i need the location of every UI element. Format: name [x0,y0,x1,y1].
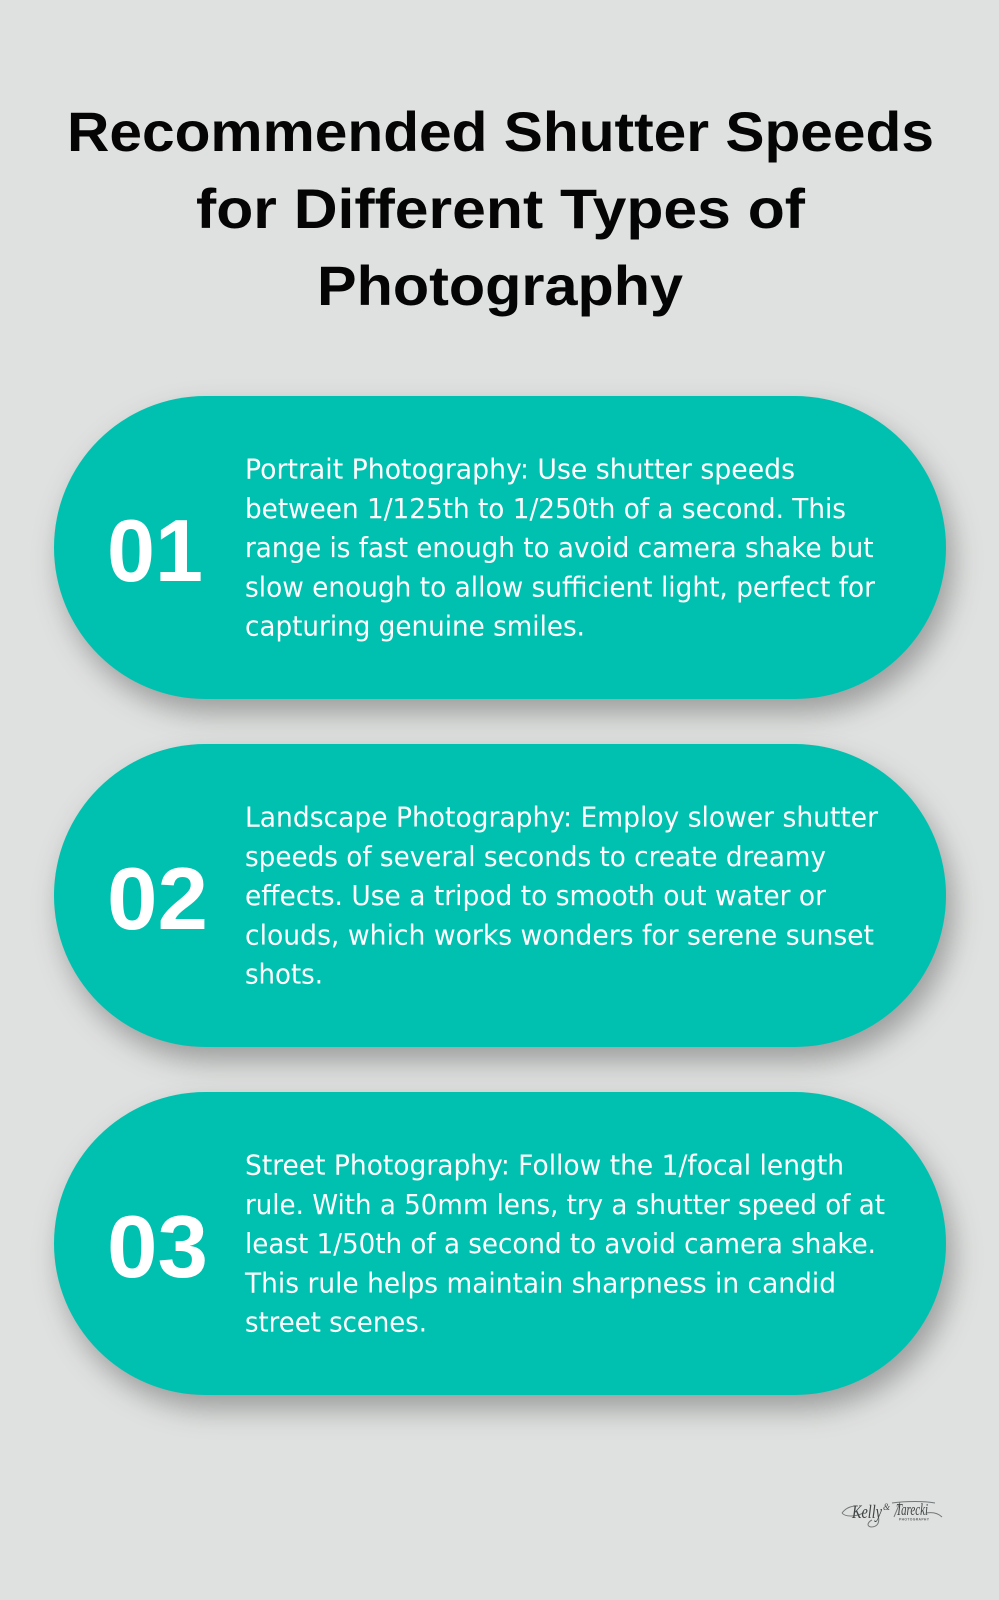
landscape text: speeds of several seconds to create dreamy [245,840,826,873]
landscape text: effects. Use a tripod to smooth out water or [245,879,826,912]
street text: least 1/50th of a second to avoid camera shake. [245,1227,876,1260]
title: Recommended Shutter Speeds [67,100,934,163]
step number 03: 03 [107,1197,208,1296]
step number 02: 02 [107,849,208,948]
panel shadow [61,758,953,1061]
landscape text [245,800,878,990]
panel shadow [61,1106,953,1409]
title: for Different Types of [196,177,805,240]
panel: portrait photography [54,396,953,713]
logo: signature [842,1500,942,1527]
portrait text: Portrait Photography: Use shutter speeds [245,452,795,486]
panel: street photography [54,1092,953,1409]
street text: rule. With a 50mm lens, try a shutter speed of at [245,1188,885,1221]
step number 01: 01 [107,501,203,600]
landscape text: clouds, which works wonders for serene sunset [245,918,874,951]
panel shadow [61,410,953,713]
logo: signature: PHOTOGRAPHY [899,1518,930,1522]
panel background [54,396,946,699]
street text: This rule helps maintain sharpness in candid [244,1266,836,1299]
street text: Street Photography: Follow the 1/focal length [245,1148,844,1182]
panel: landscape photography [54,744,953,1061]
portrait text: between 1/125th to 1/250th of a second. This [245,492,846,525]
landscape text: Landscape Photography: Employ slower shutter [245,800,878,834]
title [67,100,934,317]
street text: street scenes. [245,1306,427,1338]
logo: signature: Tarecki [896,1500,928,1519]
landscape text: shots. [245,958,323,990]
street text [244,1148,885,1338]
logo: signature: & [883,1502,890,1512]
panel background [54,1092,946,1395]
panel background [54,744,946,1047]
portrait text [245,452,875,642]
portrait text: range is fast enough to avoid camera shake but [245,531,874,564]
title: Photography [317,254,683,317]
logo: signature: Kelly [851,1502,882,1523]
portrait text: slow enough to allow sufficient light, perfect for [245,570,875,603]
portrait text: capturing genuine smiles. [245,610,585,642]
